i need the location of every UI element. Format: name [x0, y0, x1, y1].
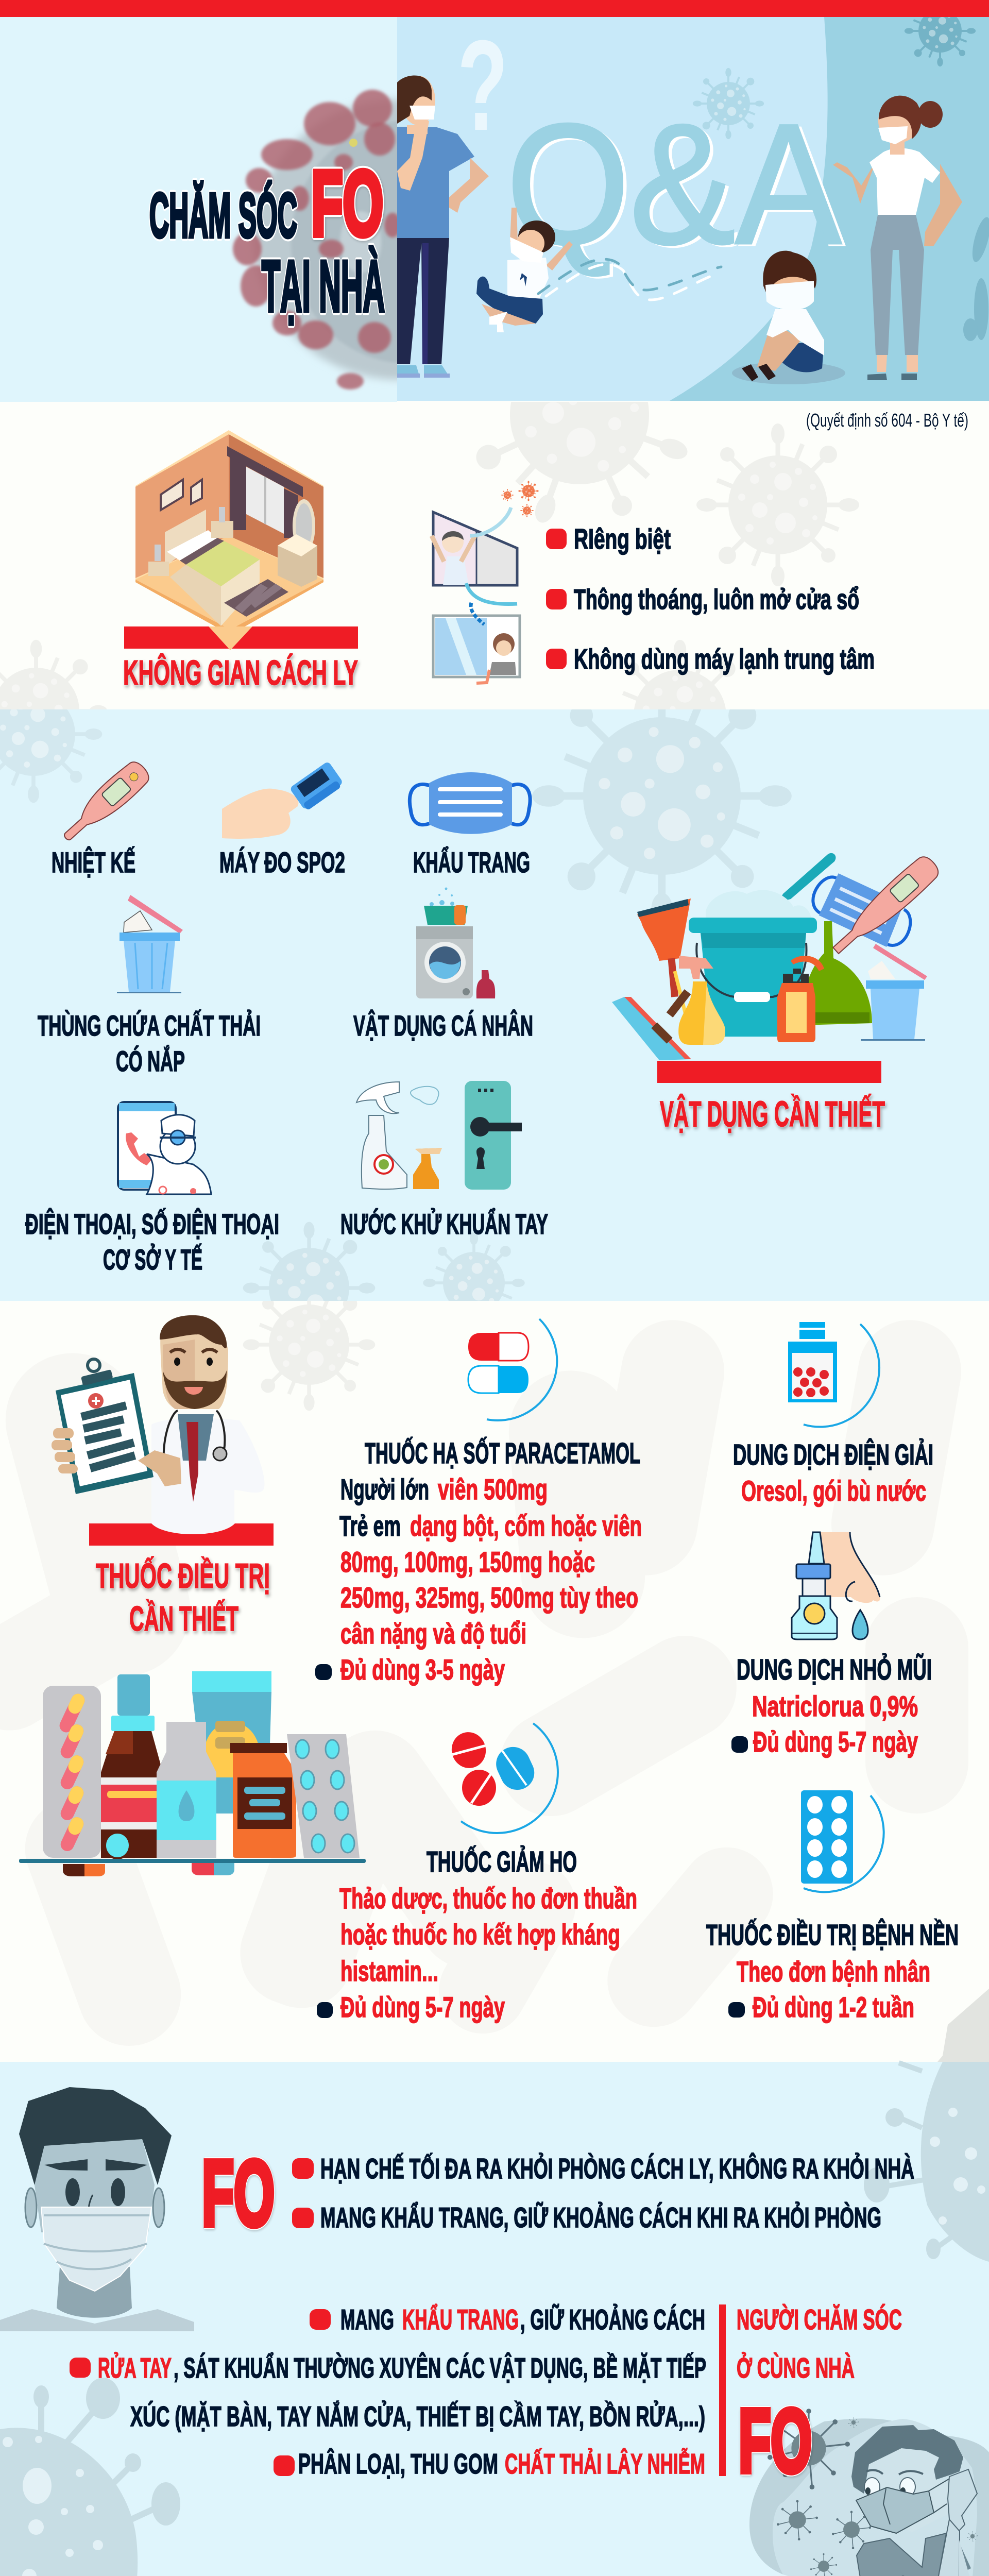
illustration: coronavirus sphere [231, 88, 397, 392]
icon: tiny virus [848, 2417, 859, 2428]
duration: Đủ dùng 5-7 ngày [340, 1991, 505, 2023]
heading: isolation space: KHÔNG GIAN CÁCH LY [123, 653, 358, 692]
heading: treatment medicine: THUỐC ĐIỀU TRỊ [96, 1556, 270, 1596]
note: Natriclorua 0,9% [752, 1690, 918, 1722]
heading bar [124, 626, 358, 649]
icon: big virus [768, 2409, 850, 2489]
illustration: Q and A lettering: Q&A [506, 89, 842, 280]
duration: Đủ dùng 3-5 ngày [340, 1653, 505, 1686]
duration: Đủ dùng 5-7 ngày [753, 1725, 918, 1758]
label: NƯỚC KHỬ KHUẨN TAY [340, 1208, 548, 1240]
block: cough medicine [317, 1723, 637, 2023]
description: histamin... [340, 1955, 438, 1987]
bullet list: caregiver rules [70, 2303, 706, 2480]
label: ĐIỆN THOẠI, SỐ ĐIỆN THOẠI [25, 1208, 279, 1240]
heading: F0 [202, 2142, 275, 2245]
dosage text: viên 500mg [438, 1473, 548, 1505]
illustration: bedroom [135, 430, 323, 635]
illustration: woman putting on a mask [749, 2409, 989, 2576]
bullet list: room requirements: RIêng biệt [574, 523, 671, 555]
illustration: dashed paths [538, 259, 721, 300]
dosage text: dạng bột, cốm hoặc viên [410, 1510, 642, 1542]
label: MÁY ĐO SPO2 [219, 846, 345, 878]
description: Thảo dược, thuốc ho đơn thuần [339, 1882, 637, 1914]
description [339, 1882, 637, 1987]
bullet list: caregiver rules: KHẨU TRANG [402, 2303, 519, 2335]
panel: necessary supplies [0, 709, 989, 1301]
top red bar [0, 0, 989, 17]
description: hoặc thuốc ho kết hợp kháng [340, 1918, 620, 1951]
icon: small orange viruses [501, 481, 539, 517]
block: chronic disease medicine [706, 1790, 959, 2023]
bullet list: room requirements [546, 523, 875, 675]
label: VẬT DỤNG CÁ NHÂN [353, 1009, 533, 1042]
block: electrolyte solution [733, 1322, 933, 1507]
heading: caregiver: FO [739, 2391, 812, 2490]
bullet list: caregiver rules: PHÂN LOẠI, THU GOM [298, 2448, 498, 2480]
block: fever medicine [315, 1319, 642, 1686]
duration [315, 1653, 505, 1686]
illustration: window with man [432, 507, 517, 604]
panel: header: TẠI NHÀ [262, 245, 385, 327]
label: THÙNG CHỨA CHẤT THẢI [38, 1009, 261, 1042]
icon: virus on shoulder [832, 2511, 871, 2549]
icon: tiny virus right [967, 2531, 978, 2541]
illustration: medicine shelf [19, 1671, 366, 1876]
item: thermometer [52, 757, 153, 878]
bullet list: caregiver rules: XÚC (MẶT BÀN, TAY NẮM CỬA, THIẾT BỊ CẦM TAY, BỒN RỬA,...) [130, 2400, 705, 2432]
item: phone and doctor [25, 1102, 279, 1276]
decoration: corner virus [937, 1989, 989, 2062]
title: CHĂM SÓC [149, 180, 297, 250]
illustration: mother [833, 96, 962, 380]
label: NHIỆT KẾ [52, 846, 135, 878]
title [149, 152, 385, 327]
heading: caregiver: NGƯỜI CHĂM SÓC [737, 2303, 902, 2335]
illustration: girl [476, 208, 573, 332]
item: waste bin [38, 895, 261, 1077]
icon: question mark: ? [457, 13, 508, 157]
label: KHẨU TRANG [413, 846, 530, 878]
heading: F0: FO [202, 2142, 275, 2245]
item: pulse oximeter [219, 761, 345, 878]
bullet list: caregiver rules: MANG [340, 2303, 394, 2335]
heading: caregiver: Ở CÙNG NHÀ [737, 2352, 855, 2384]
title: CHĂM SÓC [149, 180, 297, 250]
bullet list: room requirements: Thông thoáng, luôn mở cửa sổ [574, 583, 859, 615]
icon: small virus top right [905, 17, 976, 66]
item: washing machine [353, 887, 533, 1042]
dosage text: cân nặng và độ tuổi [340, 1617, 526, 1650]
illustration: Q and A lettering: Q&A [510, 91, 846, 282]
block: nasal drops [731, 1532, 932, 1758]
icon: virus lower [810, 2553, 837, 2576]
title: FO [311, 152, 383, 255]
illustration: window with woman [433, 603, 520, 683]
illustration: masked man [0, 2087, 194, 2331]
heading: F0: FO [202, 2142, 275, 2245]
panel: F0 and caregiver rules [0, 2062, 989, 2576]
dosage text: Trẻ em [339, 1510, 401, 1542]
heading bar [657, 1061, 881, 1083]
item: face mask [410, 772, 530, 878]
illustration: father [397, 75, 489, 378]
illustration: boy [732, 251, 845, 384]
illustration: doctor [52, 1315, 274, 1546]
item: sanitizer and door handle [340, 1081, 548, 1240]
item: waste bin: CÓ NẮP [116, 1045, 185, 1077]
panel: header: TẠI NHÀ [262, 245, 385, 327]
icon: virus left [777, 2500, 818, 2540]
heading: caregiver [737, 2303, 902, 2490]
duration: Đủ dùng 1-2 tuần [753, 1991, 914, 2023]
icon: small virus mid [693, 68, 764, 139]
decoration blobs right [963, 215, 989, 341]
bullet list: caregiver rules: RỬA TAY [98, 2352, 172, 2384]
illustration: cleaning supplies [612, 852, 943, 1060]
duration [728, 1991, 914, 2023]
dosage text: 250mg, 325mg, 500mg tùy theo [340, 1581, 638, 1614]
heading: treatment medicine: CẦN THIẾT [129, 1599, 238, 1638]
duration [317, 1991, 505, 2023]
heading: THUỐC GIẢM HO [427, 1845, 577, 1878]
dosage text [339, 1473, 642, 1650]
item: phone and doctor: CƠ SỞ Y TẾ [103, 1243, 202, 1276]
decoration: virus top right [864, 2062, 989, 2262]
decoration: virus bottom left [0, 2378, 180, 2576]
heading: caregiver: FO [739, 2391, 812, 2490]
duration [731, 1725, 918, 1758]
bullet list: F0 rules [292, 2153, 914, 2233]
panel: isolation space [0, 402, 967, 709]
divider bar [719, 2304, 726, 2476]
bullet list: caregiver rules: CHẤT THẢI LÂY NHIỄM [505, 2448, 705, 2480]
title: FO [311, 152, 383, 255]
panel: necessary medicine [0, 1279, 989, 2062]
panel: header [0, 0, 989, 402]
heading: THUỐC HẠ SỐT PARACETAMOL [365, 1436, 640, 1470]
dosage text: 80mg, 100mg, 150mg hoặc [340, 1546, 595, 1578]
bullet list: caregiver rules: , GIỮ KHOẢNG CÁCH [520, 2303, 705, 2335]
dosage text: Người lớn [340, 1473, 429, 1505]
heading: treatment medicine [96, 1556, 270, 1638]
